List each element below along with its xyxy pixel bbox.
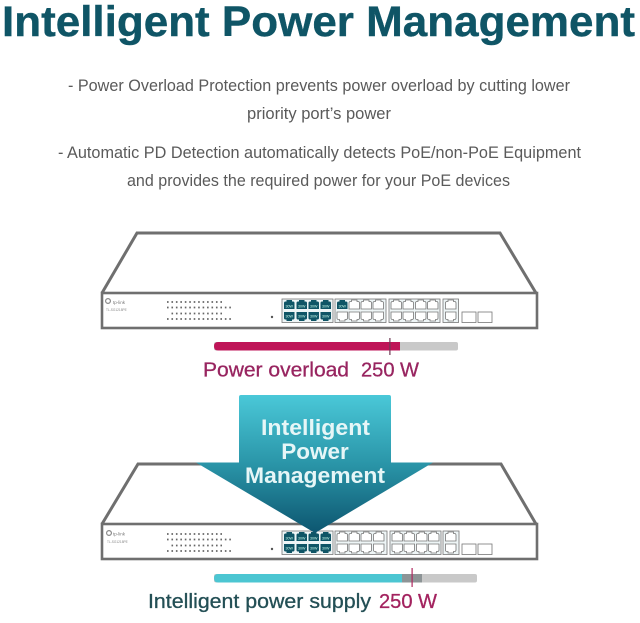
switch: power overload: 30W — [339, 304, 347, 308]
switch: power overload: 30W — [322, 314, 330, 318]
switch: intelligent power supply: 30W — [298, 546, 306, 550]
switch: intelligent power supply: 30W — [310, 546, 318, 550]
arrow: intelligent power management: Power — [281, 439, 349, 464]
switch: intelligent power supply — [102, 464, 537, 559]
switch: intelligent power supply: 30W — [286, 536, 294, 540]
switch: power overload: 30W — [298, 314, 306, 318]
switch: intelligent power supply: 30W — [298, 536, 306, 540]
switch: intelligent power supply: 30W — [310, 536, 318, 540]
switch: power overload: tp-link — [113, 300, 126, 305]
switch: intelligent power supply: tp-link — [113, 532, 126, 536]
text block: feature descriptions: - Automatic PD Detection automatically detects PoE/non-PoE Equipment — [58, 144, 581, 162]
arrow: intelligent power management: Management — [245, 463, 386, 488]
switch: power overload: 30W — [310, 304, 318, 308]
switch: power overload: 30W — [286, 314, 294, 318]
text block: feature descriptions: priority port’s power — [247, 105, 392, 123]
label: intelligent power supply: Intelligent power supply — [148, 591, 371, 613]
arrow: intelligent power management — [196, 395, 433, 533]
label: power overload — [203, 360, 419, 382]
label: power overload: 250 W — [361, 360, 419, 382]
switch: intelligent power supply: TL-SG1218PE — [107, 540, 128, 544]
text block: feature descriptions: and provides the required power for your PoE devices — [127, 172, 510, 190]
switch: power overload: 30W — [322, 304, 330, 308]
label: power overload: Power overload — [203, 360, 349, 382]
label: intelligent power supply: 250 W — [379, 591, 437, 613]
switch: power overload — [102, 233, 537, 328]
arrow: intelligent power management: Intelligent — [261, 415, 371, 440]
switch: power overload: 30W — [310, 314, 318, 318]
text block: feature descriptions: - Power Overload Protection prevents power overload by cutting lower — [68, 77, 570, 95]
switch: intelligent power supply: 30W — [286, 546, 294, 550]
switch: power overload: 30W — [286, 304, 294, 308]
power bar: intelligent supply — [214, 568, 477, 587]
switch: intelligent power supply: 30W — [322, 536, 330, 540]
switch: power overload: TL-SG1218PE — [106, 308, 127, 312]
power bar: overload — [214, 338, 458, 355]
switch: power overload: 30W — [298, 304, 306, 308]
switch: intelligent power supply: 30W — [322, 546, 330, 550]
text block: feature descriptions — [58, 77, 581, 190]
